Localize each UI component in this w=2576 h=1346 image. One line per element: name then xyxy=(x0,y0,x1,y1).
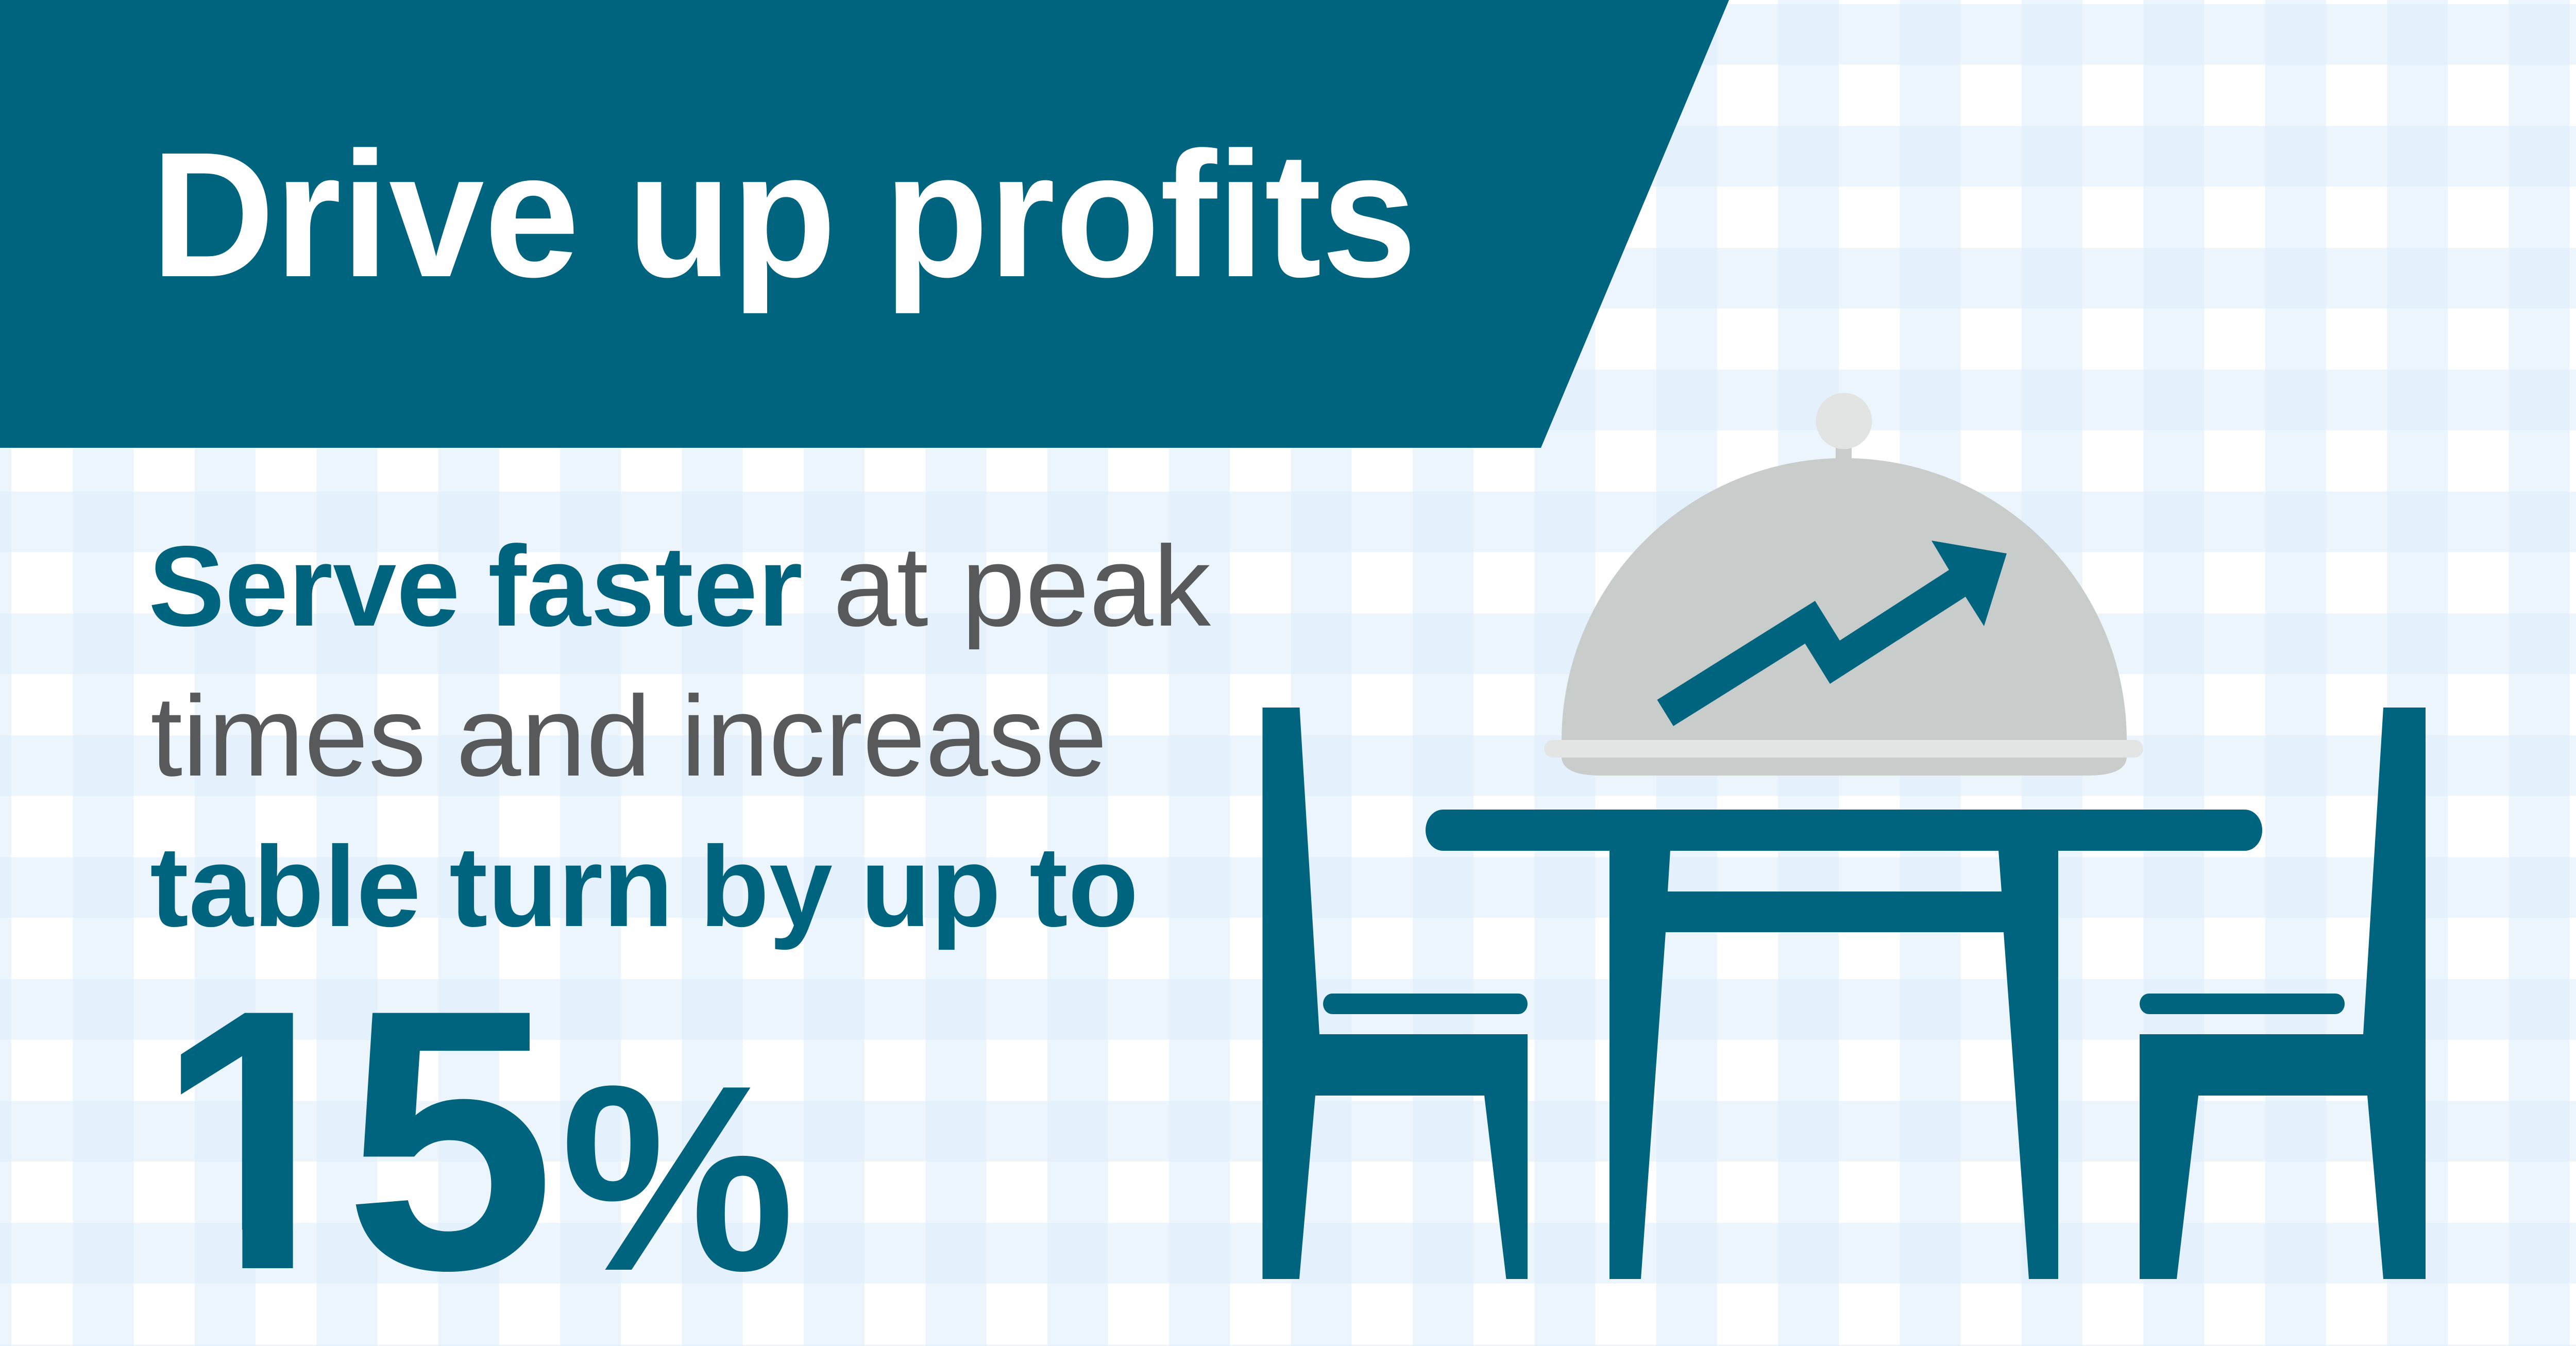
cloche knob xyxy=(1816,393,1872,461)
icon: table xyxy=(1426,810,2262,1279)
title: Drive up profits: Drive up profits xyxy=(151,115,1417,315)
line 1: Serve faster at peak xyxy=(148,523,1211,650)
line 3: table turn by up to: up xyxy=(860,823,1001,951)
icon: right chair xyxy=(2140,708,2426,1279)
line 2: times and increase: and xyxy=(456,672,651,800)
icon: left chair xyxy=(1262,708,1528,1279)
title banner xyxy=(0,0,1729,448)
statistic: 15% xyxy=(181,1013,788,1272)
line 3: table turn by up to xyxy=(150,823,1139,951)
line 2: times and increase: times xyxy=(150,672,426,800)
percent sign: % xyxy=(561,1030,795,1326)
icon: cloche on table xyxy=(1544,393,2143,776)
line 2: times and increase xyxy=(150,672,1107,800)
digit 1: 1 xyxy=(156,932,362,1346)
tray base xyxy=(1562,756,2127,776)
line 3: table turn by up to: to xyxy=(1029,823,1139,951)
line 1: Serve faster at peak: faster xyxy=(488,523,803,650)
line 2: times and increase: increase xyxy=(681,672,1107,800)
digit 5: 5 xyxy=(344,932,555,1346)
line 3: table turn by up to: by xyxy=(700,823,833,951)
line 1: Serve faster at peak: at xyxy=(833,523,928,650)
line 3: table turn by up to: turn xyxy=(449,823,673,951)
line 3: table turn by up to: table xyxy=(150,823,421,951)
plate rim xyxy=(1544,740,2143,758)
cloche dome xyxy=(1562,458,2127,741)
line 1: Serve faster at peak: Serve xyxy=(148,523,460,650)
icon: rising arrow xyxy=(1657,541,2007,726)
line 1: Serve faster at peak: peak xyxy=(961,523,1211,650)
text block: serve faster statement xyxy=(148,523,1211,951)
